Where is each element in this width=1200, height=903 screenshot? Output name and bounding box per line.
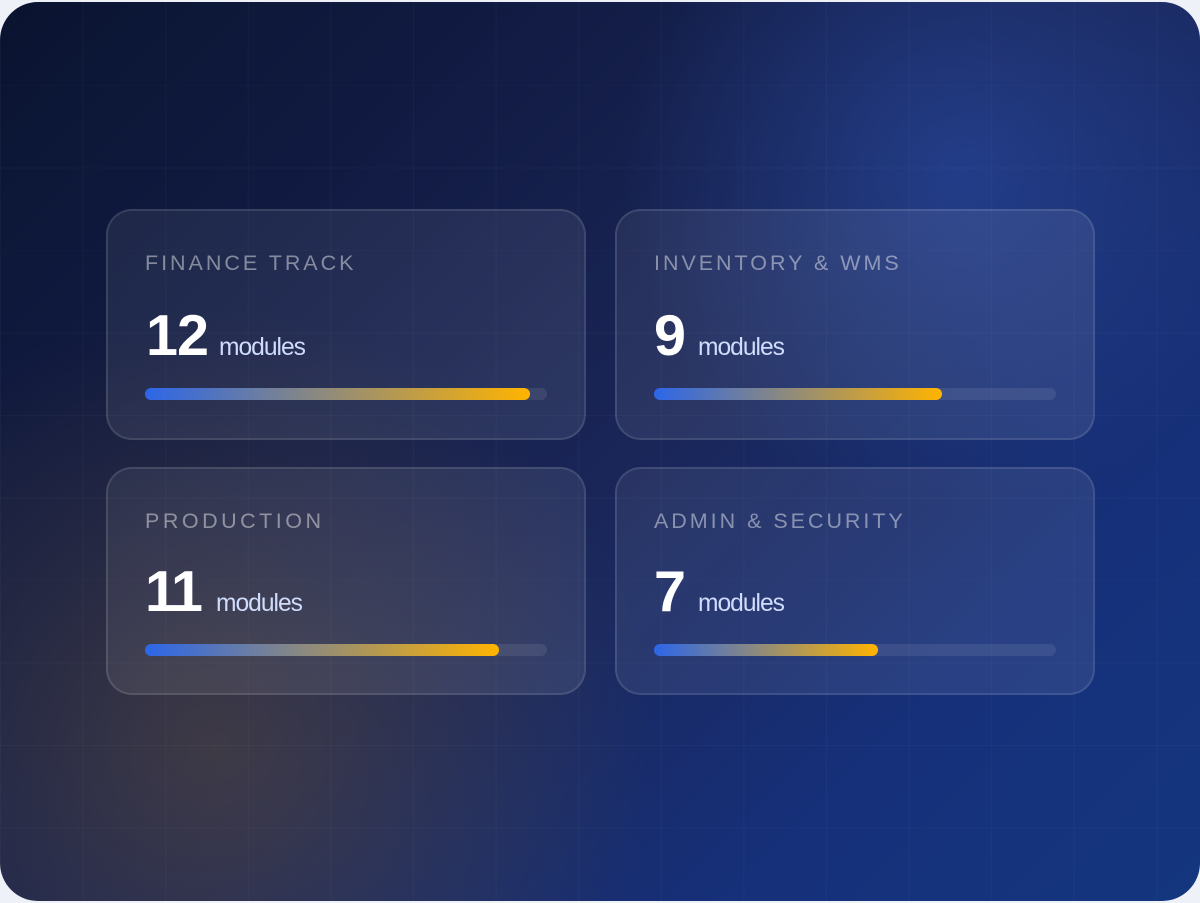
label: production: PRODUCTION [145,509,325,533]
label: admin and security: ADMIN & SECURITY [654,509,906,533]
unit: modules: modules [698,334,784,361]
value: 11: 11 [145,560,197,624]
progress bar: production [145,644,547,656]
progress bar: admin and security [654,644,1056,656]
unit: modules: modules [698,590,784,617]
value: 9: 9 [654,304,685,368]
value: 7: 7 [654,560,685,624]
panel: admin and security [615,467,1095,695]
progress bar: finance track [145,388,547,400]
panel: production [106,467,586,695]
panel: inventory and wms [615,209,1095,440]
unit: modules: modules [216,590,302,617]
label: inventory and wms: INVENTORY & WMS [654,251,902,275]
value: 12: 12 [146,304,208,368]
progress bar: inventory and wms [654,388,1056,400]
panel: finance track [106,209,586,440]
label: finance track: FINANCE TRACK [145,251,356,275]
unit: modules: modules [219,334,305,361]
